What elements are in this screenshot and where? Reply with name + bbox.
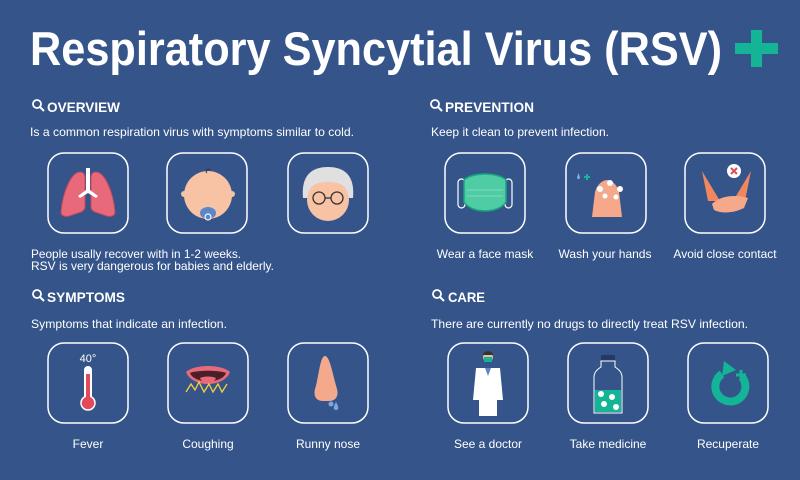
panel: overview: RSV is very dangerous for babies and elderly.: [31, 259, 274, 273]
icon: runny nose: [288, 343, 368, 423]
labels: care: See a doctor: [454, 437, 522, 451]
title: Respiratory Syncytial Virus (RSV): [30, 22, 722, 75]
icon: thermometer: 40°: [80, 353, 96, 365]
labels: care: Recuperate: [697, 437, 759, 451]
text: overview notes: People usally recover with in 1-2 weeks.: [31, 247, 241, 261]
icon: face mask: [445, 153, 525, 233]
labels: symptoms: Coughing: [182, 437, 234, 451]
icon: recuperate: [688, 343, 768, 423]
icon: handshake: [685, 153, 765, 233]
icon: lungs: [48, 153, 128, 233]
labels: symptoms: Fever: [73, 437, 103, 451]
heading: overview: OVERVIEW: [47, 99, 121, 115]
icon: green plus: [735, 30, 778, 67]
labels: symptoms: [73, 437, 360, 451]
heading: prevention: PREVENTION: [445, 99, 534, 115]
text: overview description: Is a common respiration virus with symptoms similar to cold.: [30, 125, 354, 139]
panel: symptoms: [31, 289, 368, 451]
heading: care: [433, 289, 485, 305]
labels: prevention: Wear a face mask: [437, 247, 534, 261]
icon: thermometer: [48, 343, 128, 423]
text: care description: There are currently no drugs to directly treat RSV infection.: [431, 317, 748, 331]
labels: prevention: Avoid close contact: [673, 247, 777, 261]
icon: medicine bottle: [568, 343, 648, 423]
panel: care: [431, 289, 768, 451]
labels: care: [454, 437, 759, 451]
labels: prevention: [437, 247, 777, 261]
icon: wash hands: [566, 153, 646, 233]
icon: coughing mouth: [168, 343, 248, 423]
labels: symptoms: Runny nose: [296, 437, 360, 451]
icon: baby: [167, 153, 247, 233]
heading: care: CARE: [448, 289, 485, 305]
panel: overview: [30, 99, 368, 273]
icon: doctor: [448, 343, 528, 423]
icon: elderly: [288, 153, 368, 233]
labels: prevention: Wash your hands: [559, 247, 651, 261]
text: symptoms description: Symptoms that indicate an infection.: [31, 317, 227, 331]
labels: care: Take medicine: [570, 437, 647, 451]
panel: prevention: [431, 99, 777, 261]
text: prevention description: Keep it clean to prevent infection.: [431, 125, 609, 139]
heading: symptoms: SYMPTOMS: [47, 289, 125, 305]
